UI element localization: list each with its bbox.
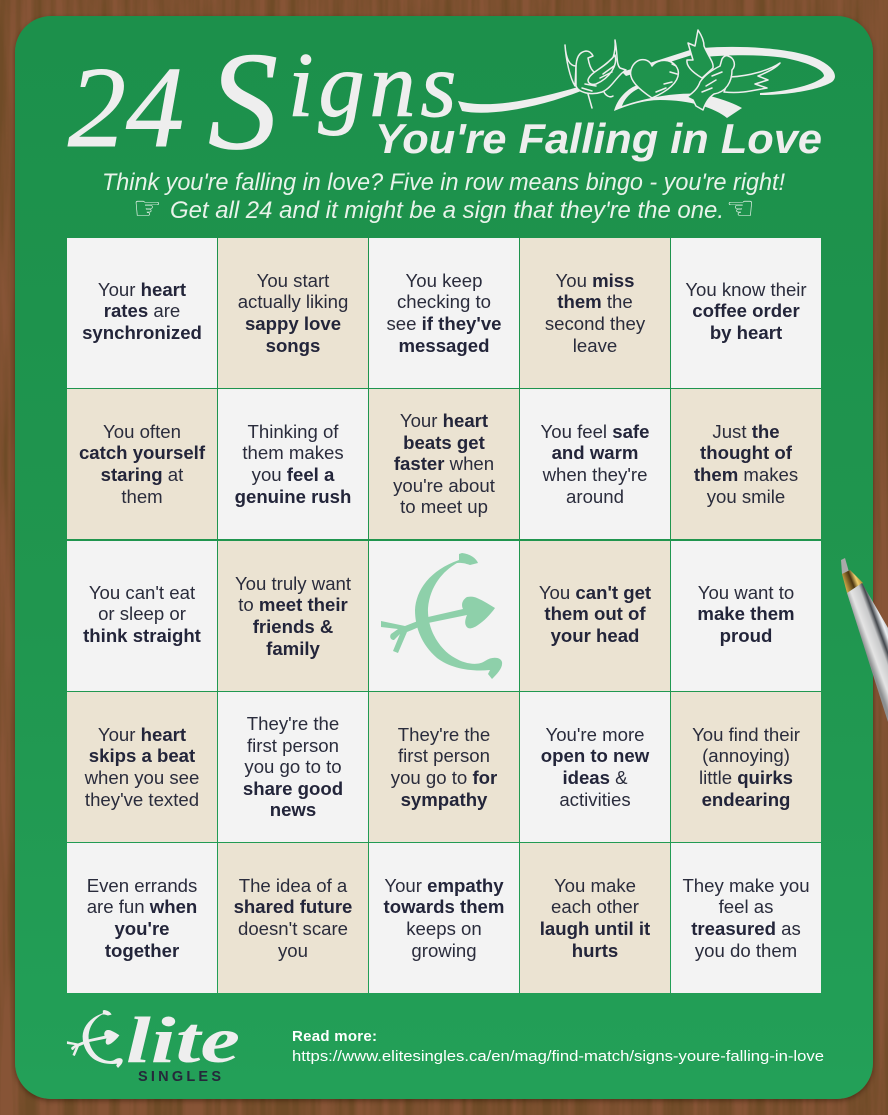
square 21: together	[105, 940, 179, 961]
square 1: Your heart	[98, 279, 186, 300]
square 8: beats get	[403, 432, 485, 453]
square 16: skips a beat	[89, 745, 195, 766]
square 22: you	[278, 940, 308, 961]
read more link text: Read more:	[292, 1028, 377, 1045]
square 15: make them	[697, 603, 795, 624]
square 9: when they're	[543, 464, 647, 485]
square 6: staring at	[101, 464, 183, 485]
square 20: little quirks	[699, 767, 793, 788]
square 10	[671, 389, 821, 539]
right dove wing and body	[687, 30, 780, 110]
square 20: You find their	[692, 724, 800, 745]
read more link text: https://www.elitesingles.ca/en/mag/find-match/signs-youre-falling-in-love	[292, 1048, 824, 1065]
square 6: catch yourself	[79, 442, 205, 463]
square 22: doesn't scare	[238, 918, 348, 939]
square 10: thought of	[700, 442, 792, 463]
square 7: Thinking of	[248, 421, 338, 442]
icon: bow and arrow	[381, 553, 502, 679]
square 11: You can't eat	[89, 582, 195, 603]
square 6: You often	[103, 421, 181, 442]
square 23	[369, 843, 519, 993]
square 3: You keep	[406, 270, 482, 291]
square 3: checking to	[397, 291, 491, 312]
square 22: shared future	[234, 896, 352, 917]
square 5	[671, 238, 821, 388]
square 24: each other	[551, 896, 639, 917]
square 2: songs	[266, 335, 320, 356]
square 22: The idea of a	[239, 875, 347, 896]
square 11: or sleep or	[98, 603, 186, 624]
square 12	[218, 541, 368, 691]
square 25: They make you	[682, 875, 810, 896]
square 23: growing	[411, 940, 477, 961]
square 18: sympathy	[401, 789, 487, 810]
square 1	[67, 238, 217, 388]
square 10: you smile	[707, 486, 785, 507]
square 15	[671, 541, 821, 691]
square 9: around	[566, 486, 624, 507]
logo arrow E	[67, 1010, 123, 1068]
square 23: Your empathy	[384, 875, 504, 896]
square 2: actually liking	[238, 291, 348, 312]
square 15: You want to	[698, 582, 794, 603]
square 1: synchronized	[82, 322, 202, 343]
square 15: proud	[720, 625, 772, 646]
square 1: rates are	[104, 300, 180, 321]
square 16: they've texted	[85, 789, 199, 810]
intro text: Get all 24 and it might be a sign that they're the one.	[170, 197, 724, 224]
left dove	[565, 40, 626, 108]
square 9: You feel safe	[541, 421, 649, 442]
square 3: messaged	[398, 335, 489, 356]
square 9	[520, 389, 670, 539]
square 25: feel as	[719, 896, 773, 917]
square 14: your head	[551, 625, 639, 646]
square 4: leave	[573, 335, 617, 356]
logo: Elite Singles	[67, 1004, 240, 1085]
free square with bow and arrow	[369, 541, 519, 691]
square 12: friends &	[253, 616, 333, 637]
square 7	[218, 389, 368, 539]
square 18	[369, 692, 519, 842]
square 8: to meet up	[400, 496, 488, 517]
icon: pointing hand right: ☞	[133, 189, 162, 227]
square 3: see if they've	[386, 313, 502, 334]
square 20	[671, 692, 821, 842]
square 10: Just the	[712, 421, 780, 442]
square 14	[520, 541, 670, 691]
square 4: second they	[545, 313, 645, 334]
square 8: Your heart	[400, 410, 488, 431]
square 17: news	[270, 799, 316, 820]
intro text	[102, 169, 785, 224]
square 2	[218, 238, 368, 388]
square 2: sappy love	[245, 313, 341, 334]
square 17: They're the	[247, 713, 339, 734]
ribbon swoosh	[458, 47, 835, 118]
square 24: laugh until it	[540, 918, 650, 939]
square 7: them makes	[242, 442, 344, 463]
square 21	[67, 843, 217, 993]
square 4	[520, 238, 670, 388]
square 9: and warm	[552, 442, 638, 463]
square 24: You make	[554, 875, 636, 896]
square 17: you go to to	[244, 756, 342, 777]
square 12: You truly want	[235, 573, 351, 594]
header artwork and title	[68, 24, 835, 227]
square 2: You start	[257, 270, 329, 291]
square 22	[218, 843, 368, 993]
square 14: them out of	[544, 603, 646, 624]
square 18: They're the	[398, 724, 490, 745]
title: 24 Signs: igns	[288, 34, 461, 136]
square 11	[67, 541, 217, 691]
title: 24 Signs	[68, 24, 461, 179]
square 20: (annoying)	[702, 745, 790, 766]
read more link text	[292, 1028, 824, 1065]
square 12: to meet their	[238, 594, 348, 615]
icon: pointing hand left: ☜	[726, 189, 755, 227]
square 25	[671, 843, 821, 993]
square 6	[67, 389, 217, 539]
square 19: activities	[559, 789, 631, 810]
square 4: them the	[557, 291, 633, 312]
square 8: faster when	[394, 453, 494, 474]
square 16: Your heart	[98, 724, 186, 745]
square 25: treasured as	[691, 918, 801, 939]
square 5: You know their	[685, 279, 807, 300]
square 17: share good	[243, 778, 343, 799]
square 19: You're more	[546, 724, 644, 745]
square 24: hurts	[572, 940, 618, 961]
square 7: genuine rush	[235, 486, 351, 507]
square 14: You can't get	[539, 582, 651, 603]
square 16	[67, 692, 217, 842]
square 3	[369, 238, 519, 388]
square 21: Even errands	[87, 875, 197, 896]
square 19: open to new	[541, 745, 649, 766]
square 11: think straight	[83, 625, 201, 646]
square 17	[218, 692, 368, 842]
square 21: you're	[114, 918, 170, 939]
square 20: endearing	[702, 789, 790, 810]
square 12: family	[266, 638, 320, 659]
logo subword: SINGLES	[138, 1069, 221, 1085]
square 5: by heart	[710, 322, 782, 343]
square 25: you do them	[695, 940, 797, 961]
square 19	[520, 692, 670, 842]
square 23: towards them	[384, 896, 504, 917]
square 24	[520, 843, 670, 993]
square 23: keeps on	[406, 918, 482, 939]
square 19: ideas &	[562, 767, 628, 788]
intro text: Think you're falling in love? Five in row means bingo - you're right!	[102, 169, 785, 196]
square 18: you go to for	[391, 767, 497, 788]
square 4: You miss	[556, 270, 634, 291]
icon: two doves and a heart	[565, 30, 780, 110]
title: You're Falling in Love: You're Falling in Love	[375, 115, 822, 162]
square 8: you're about	[393, 475, 495, 496]
square 8	[369, 389, 519, 539]
square 17: first person	[247, 735, 339, 756]
square 18: first person	[398, 745, 490, 766]
heart	[631, 60, 678, 98]
square 7: you feel a	[252, 464, 334, 485]
title: 24 Signs: S	[208, 24, 278, 179]
square 16: when you see	[85, 767, 199, 788]
logo word: lite	[126, 1004, 240, 1077]
pen	[841, 558, 888, 722]
square 21: are fun when	[87, 896, 197, 917]
square 5: coffee order	[692, 300, 800, 321]
square 6: them	[121, 486, 163, 507]
title: 24 Signs: 24	[68, 44, 184, 172]
square 10: them makes	[694, 464, 798, 485]
